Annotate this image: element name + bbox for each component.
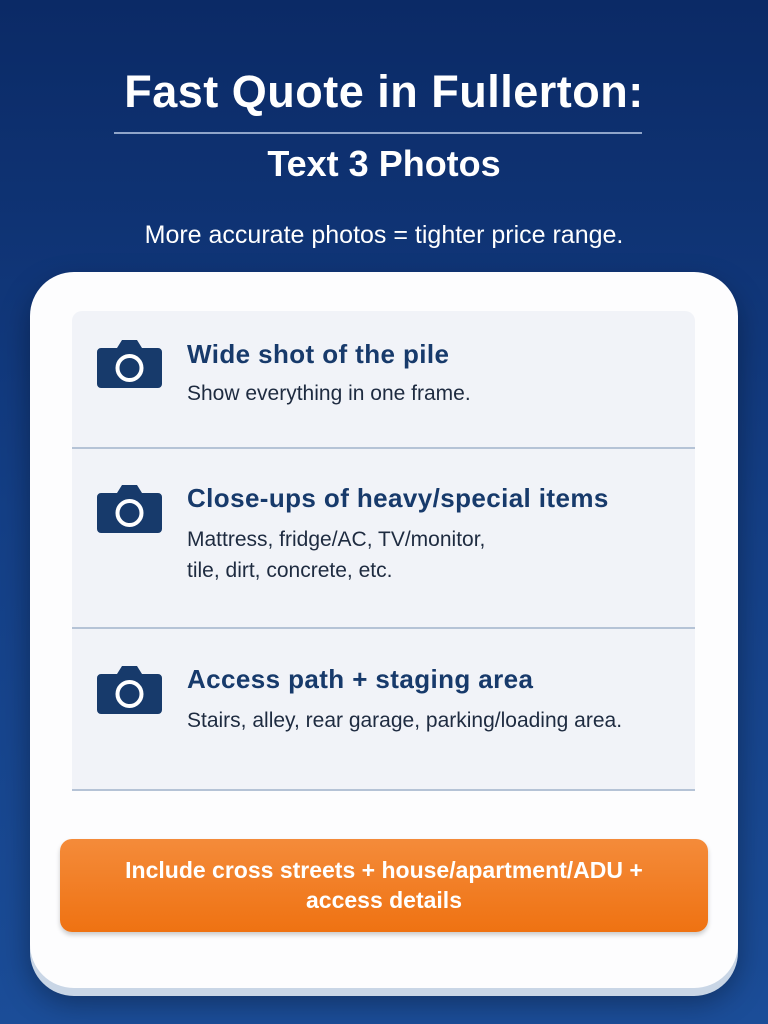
callout button <box>60 839 708 932</box>
card panel <box>30 272 738 988</box>
row 2: tile, dirt, concrete, etc. <box>187 559 392 582</box>
row 2 <box>72 449 695 629</box>
callout button: Include cross streets + house/apartment/ADU + <box>125 857 643 883</box>
row 1 <box>72 311 695 449</box>
row 1: Wide shot of the pile <box>187 339 449 369</box>
row 3: Access path + staging area <box>187 664 533 694</box>
row 3 <box>72 629 695 791</box>
row 1: Show everything in one frame. <box>187 382 471 405</box>
row 2: Close-ups of heavy/special items <box>187 483 609 513</box>
icon: camera <box>97 340 162 388</box>
row 2: Mattress, fridge/AC, TV/monitor, <box>187 528 485 551</box>
subtitle: Text 3 Photos <box>267 143 501 184</box>
callout button: access details <box>306 887 462 913</box>
panel: photo checklist <box>72 311 695 791</box>
icon: camera <box>97 666 162 714</box>
row 3: Stairs, alley, rear garage, parking/loading area. <box>187 709 622 732</box>
tagline: More accurate photos = tighter price range. <box>145 221 623 249</box>
icon: camera <box>97 485 162 533</box>
title: Fast Quote in Fullerton: <box>124 66 644 117</box>
